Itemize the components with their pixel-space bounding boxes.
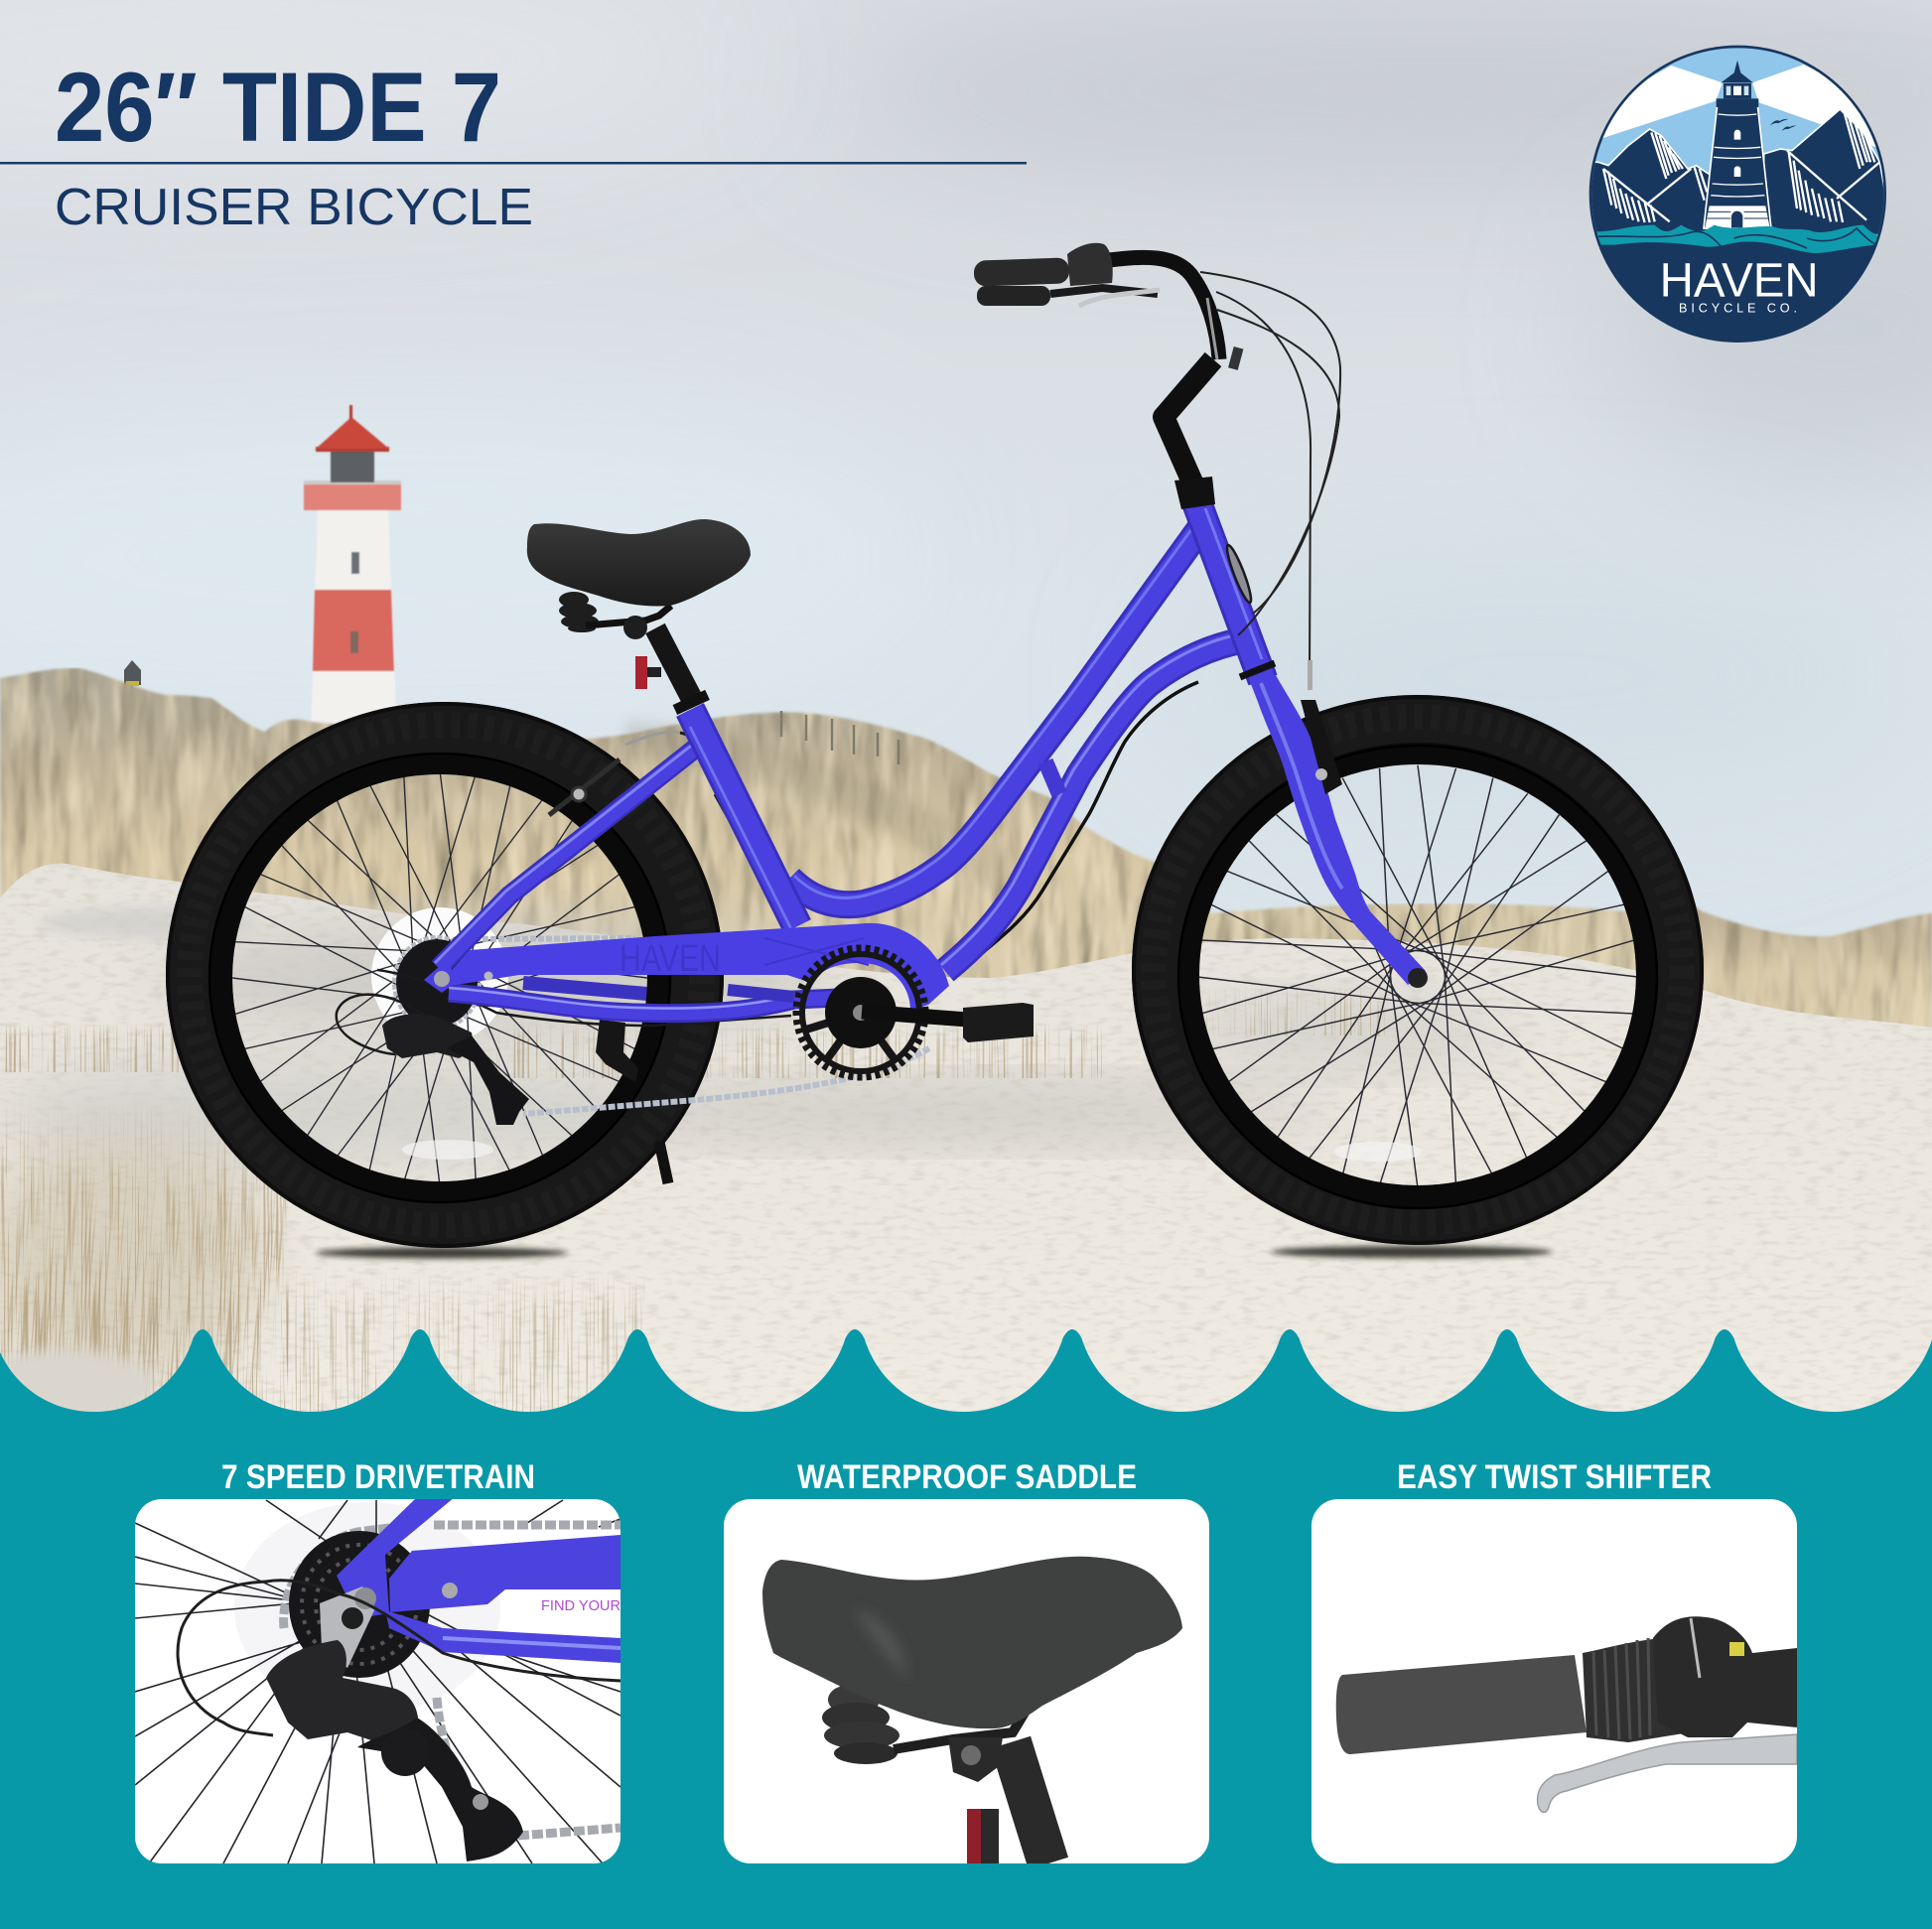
brake and shifter cables (1200, 272, 1340, 675)
sand dunes with grass (0, 668, 1932, 1052)
logo birds (1770, 119, 1796, 131)
saddle reflector (967, 1809, 999, 1863)
close-up chain (284, 1525, 621, 1837)
seat post and reflector (635, 628, 710, 715)
shifter twist ring (1583, 1636, 1690, 1742)
teal wave band (0, 1329, 1932, 1929)
logo sky (1588, 47, 1887, 241)
beach photo background (0, 0, 1932, 1440)
feature heading: shifter: EASY TWIST SHIFTER (1397, 1458, 1712, 1496)
rear brake and cable (549, 732, 784, 918)
head badge (1223, 543, 1255, 605)
saddle (527, 519, 751, 639)
panel: saddle close-up (724, 1499, 1209, 1863)
shadows under the wheels (316, 1246, 1553, 1259)
close-up spokes (135, 1500, 621, 1863)
front wheel (1132, 695, 1704, 1245)
close-up tube highlight (443, 1638, 621, 1648)
saddle body (762, 1557, 1182, 1728)
sand (0, 864, 1932, 1440)
kickstand (659, 1142, 668, 1183)
reeds on the sand (0, 986, 1385, 1420)
subtitle: CRUISER BICYCLE (55, 179, 533, 236)
logo mountains (1586, 129, 1711, 235)
logo tagline: BICYCLE CO. (1679, 301, 1797, 315)
bicycle (166, 243, 1704, 1248)
feature heading: drivetrain: 7 SPEED DRIVETRAIN (221, 1458, 535, 1496)
close-up frame (337, 1497, 621, 1663)
logo wordmark: HAVEN (1660, 253, 1819, 307)
stem and headset (1164, 359, 1215, 509)
saddle seat post (1011, 1742, 1048, 1863)
close-up cable (178, 1581, 621, 1735)
fork (1240, 663, 1428, 988)
title: 26″ TIDE 7 (55, 52, 501, 162)
close-up bolts and hanger (320, 1583, 458, 1668)
dune sign post (124, 660, 141, 701)
logo lighthouse (1704, 61, 1771, 228)
chainring and crank (797, 949, 968, 1076)
shifter grip (1336, 1655, 1587, 1754)
logo light beams (1582, 65, 1879, 149)
chain guard (424, 923, 949, 1011)
panel: shifter close-up (1311, 1499, 1797, 1863)
saddle coil spring (822, 1684, 899, 1764)
close-up spoke protector (234, 1502, 500, 1715)
panel: drivetrain close-up (135, 1497, 621, 1863)
close-up derailleur (266, 1640, 523, 1861)
close-up decal text: FIND YOUR (541, 1597, 621, 1614)
saddle clamp (894, 1708, 1028, 1782)
drivetrain: cassette, chain, derailleur (337, 937, 929, 1125)
handlebar, grips and shifter (974, 243, 1243, 370)
title rule (0, 162, 1027, 165)
shifter brake lever (1538, 1734, 1797, 1812)
logo waves (1596, 225, 1879, 253)
front brake (1301, 660, 1342, 794)
frame tubes (435, 501, 1263, 1014)
logo: Haven Bicycle Co. (1582, 46, 1893, 343)
close-up cassette (289, 1531, 430, 1678)
shifter body (1653, 1616, 1797, 1737)
rear wheel (166, 702, 724, 1248)
feature heading: saddle: WATERPROOF SADDLE (797, 1458, 1137, 1496)
chain guard: HAVEN (620, 938, 721, 980)
distant lighthouse (304, 405, 401, 735)
pedal (963, 1003, 1034, 1042)
saddle highlight (854, 1608, 908, 1678)
